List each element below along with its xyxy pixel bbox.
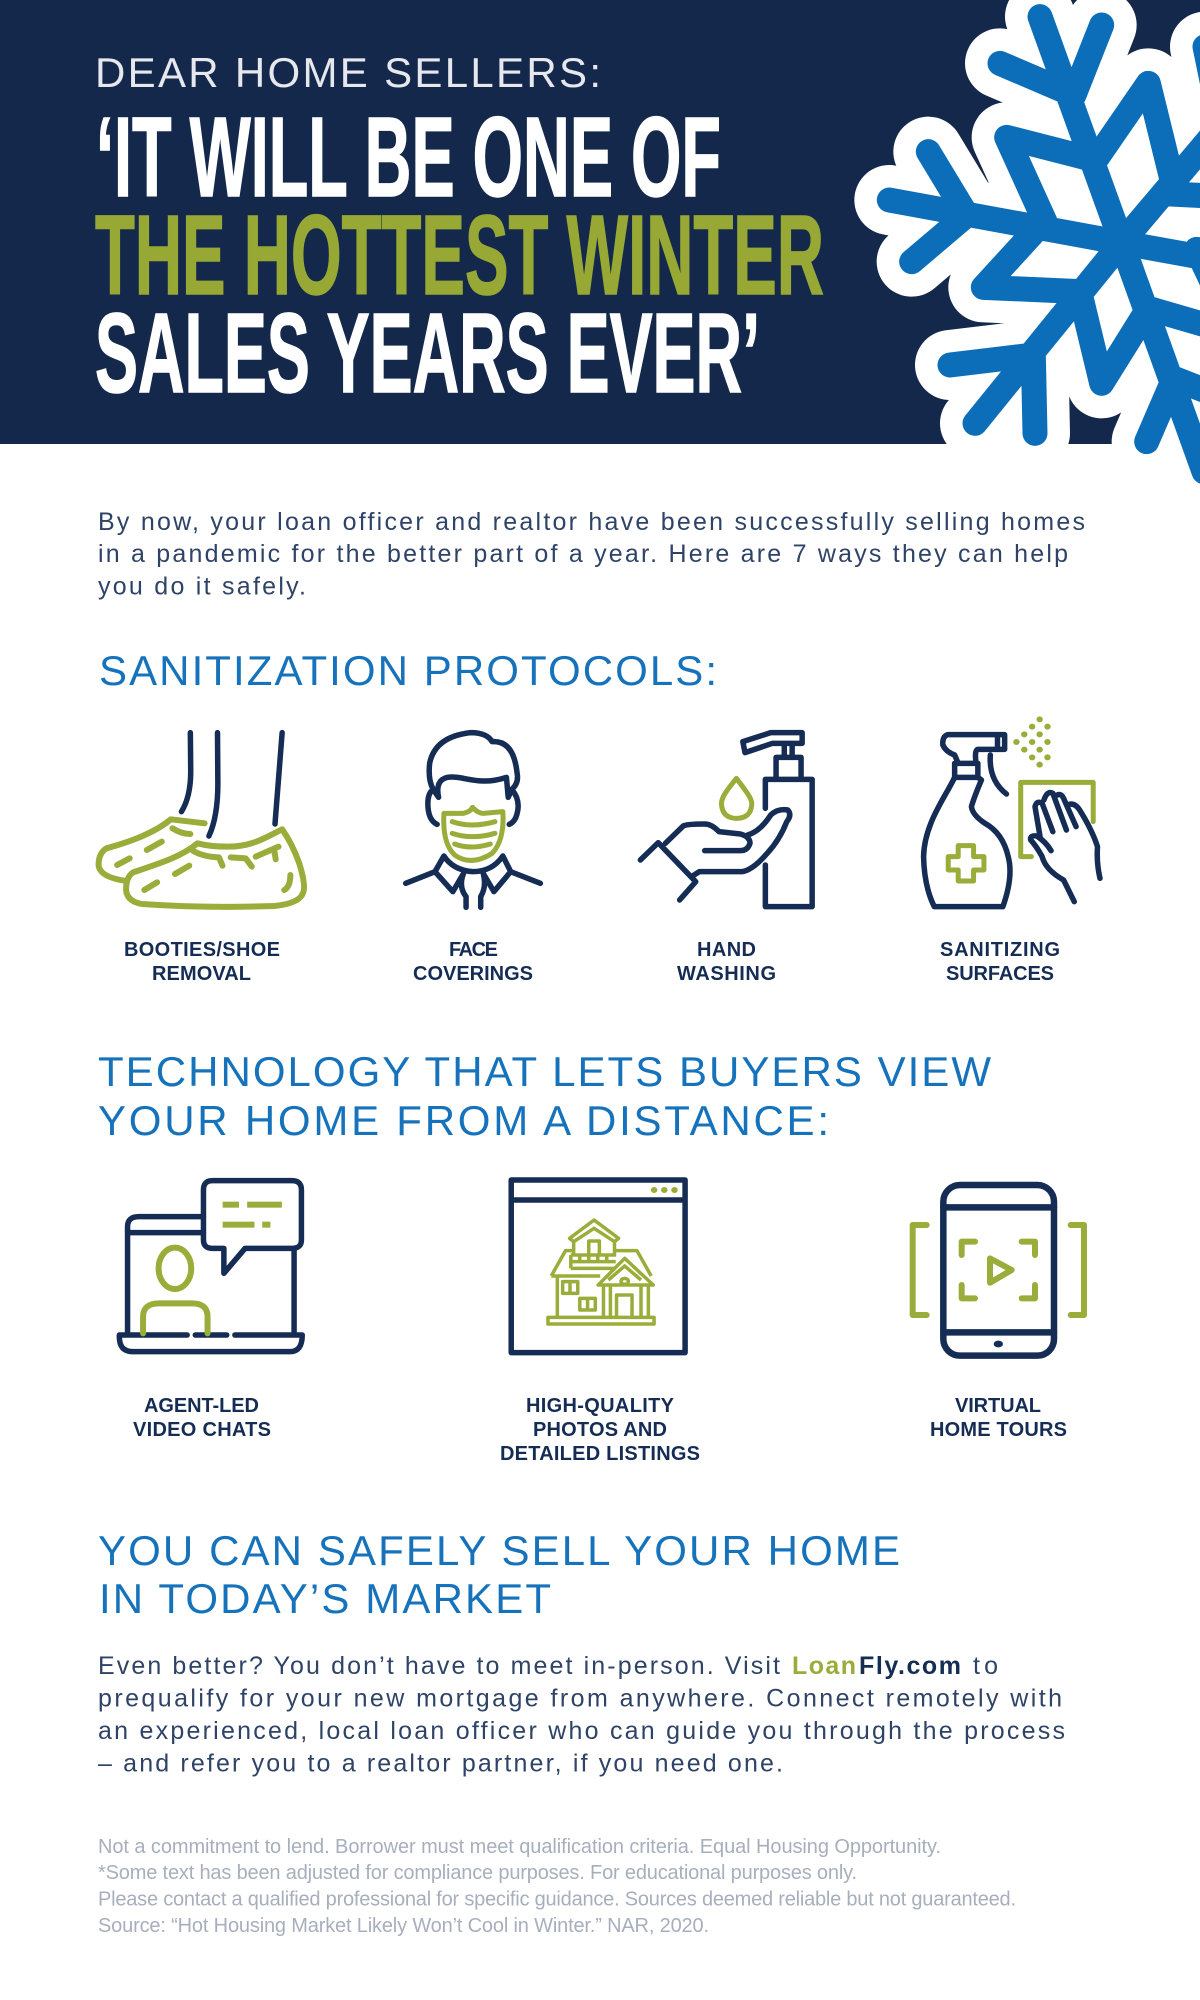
- label: sanitizing surfaces: SANITIZING: [940, 939, 1060, 961]
- label: agent-led video chats: [133, 1395, 271, 1441]
- label: virtual home tours: HOME TOURS: [930, 1419, 1067, 1441]
- label: hand washing: HAND: [697, 939, 756, 961]
- closing paragraph: an experienced, local loan officer who can guide you through the process: [98, 1717, 1065, 1745]
- closing paragraph: prequalify for your new mortgage from anywhere. Connect remotely with: [98, 1684, 1062, 1712]
- label: high-quality photos: [500, 1395, 700, 1465]
- heading: technology: [98, 1048, 991, 1144]
- closing paragraph: – and refer you to a realtor partner, if you need one.: [98, 1750, 783, 1778]
- footer disclaimer: Please contact a qualified professional for specific guidance. Sources deemed reliable but not guaranteed.: [98, 1888, 1016, 1910]
- label: booties: [124, 939, 280, 985]
- heading: sell safely: YOU CAN SAFELY SELL YOUR HOME: [98, 1527, 900, 1574]
- label: face coverings: FACE: [449, 939, 498, 961]
- label: agent-led video chats: AGENT-LED: [144, 1395, 259, 1417]
- closing paragraph: Even better? You don’t have to meet in-person. Visit: [98, 1652, 780, 1680]
- icon: sanitizing surfaces: [924, 716, 1100, 907]
- icon: face mask: [406, 733, 540, 907]
- label: agent-led video chats: VIDEO CHATS: [133, 1419, 271, 1441]
- label: booties: BOOTIES/SHOE: [124, 939, 280, 961]
- heading: sanitization protocols: SANITIZATION PROTOCOLS:: [99, 647, 717, 694]
- label: face coverings: COVERINGS: [413, 963, 533, 985]
- footer disclaimer: Not a commitment to lend. Borrower must meet qualification criteria. Equal Housing Opportunity.: [98, 1836, 941, 1858]
- intro paragraph: you do it safely.: [98, 572, 306, 600]
- house illustration: [548, 1220, 654, 1324]
- closing paragraph: to: [973, 1652, 998, 1680]
- intro paragraph: in a pandemic for the better part of a year. Here are 7 ways they can help: [98, 540, 1068, 568]
- intro paragraph: [98, 508, 1085, 600]
- title: [95, 94, 824, 416]
- label: hand washing: [677, 939, 776, 985]
- intro paragraph: By now, your loan officer and realtor have been successfully selling homes: [98, 508, 1085, 536]
- header eyebrow text: DEAR HOME SELLERS:: [95, 49, 601, 96]
- heading: technology: TECHNOLOGY THAT LETS BUYERS VIEW: [98, 1048, 991, 1095]
- footer disclaimer: Source: “Hot Housing Market Likely Won’t Cool in Winter.” NAR, 2020.: [98, 1915, 709, 1937]
- icon: booties: [99, 733, 304, 907]
- label: high-quality photos: DETAILED LISTINGS: [500, 1443, 700, 1465]
- icon: hand washing: [640, 733, 812, 907]
- label: hand washing: WASHING: [677, 963, 776, 985]
- label: sanitizing surfaces: [940, 939, 1060, 985]
- panel: header banner: [0, 0, 1200, 444]
- title: ‘IT WILL BE ONE OF: [96, 94, 721, 220]
- icon: listing photo browser: [511, 1180, 685, 1353]
- label: high-quality photos: PHOTOS AND: [533, 1419, 667, 1441]
- footer disclaimer: [98, 1836, 1016, 1937]
- icon: virtual tour tablet: [913, 1185, 1084, 1356]
- label: virtual home tours: [930, 1395, 1067, 1441]
- closing paragraph: Fly.com: [859, 1652, 961, 1680]
- label: high-quality photos: HIGH-QUALITY: [526, 1395, 675, 1417]
- heading: technology: YOUR HOME FROM A DISTANCE:: [98, 1097, 829, 1144]
- label: booties: REMOVAL: [152, 963, 251, 985]
- label: sanitizing surfaces: SURFACES: [946, 963, 1054, 985]
- heading: sell safely: [98, 1527, 900, 1622]
- footer disclaimer: *Some text has been adjusted for compliance purposes. For educational purposes only.: [98, 1862, 857, 1884]
- label: face coverings: [413, 939, 533, 985]
- icon: agent video chat: [119, 1181, 302, 1352]
- closing paragraph: Loan: [792, 1652, 856, 1680]
- icon: snowflake: [889, 17, 1200, 472]
- closing paragraph: [98, 1652, 1065, 1778]
- label: virtual home tours: VIRTUAL: [955, 1395, 1041, 1417]
- heading: sell safely: IN TODAY’S MARKET: [99, 1575, 551, 1622]
